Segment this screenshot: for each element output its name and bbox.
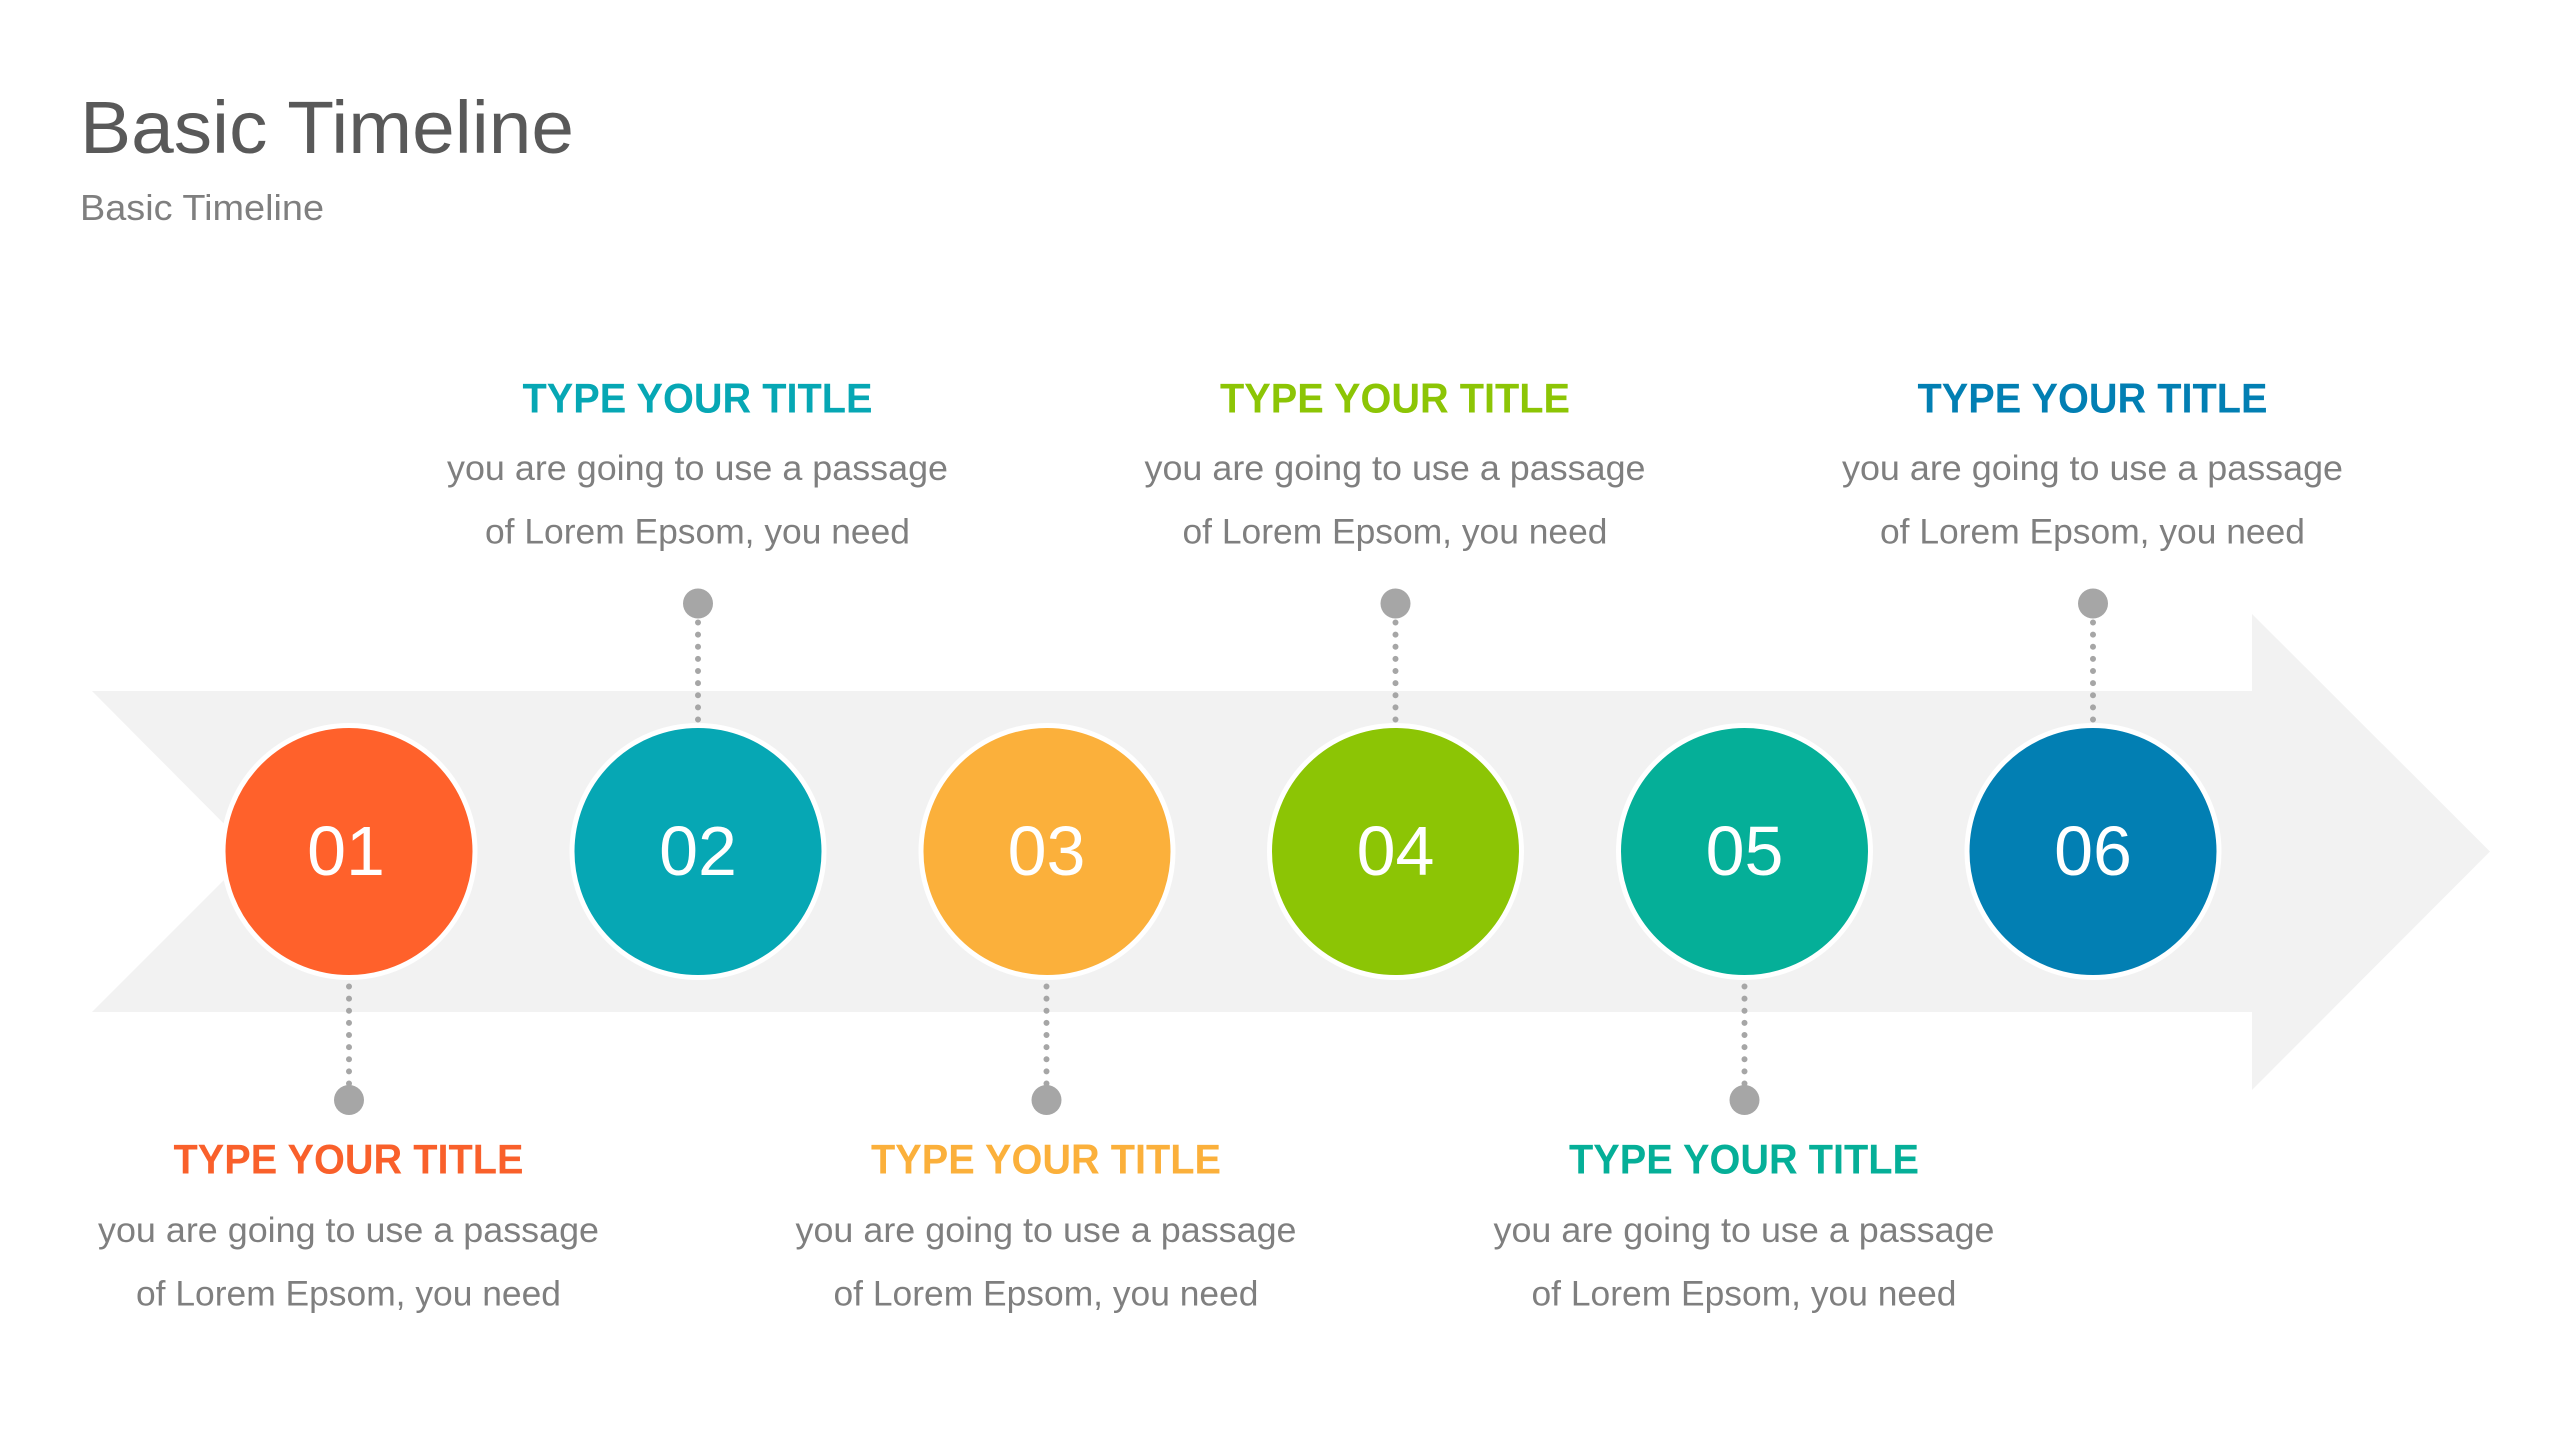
number 06: 06 [2054, 812, 2132, 890]
connector 02 [695, 622, 701, 720]
body 05: of Lorem Epsom, you need [1532, 1274, 1956, 1314]
body 05: you are going to use a passage [1494, 1210, 1994, 1250]
body 04: you are going to use a passage [1144, 448, 1646, 488]
circle 06 [1967, 726, 2219, 978]
milestone 03 [796, 726, 1296, 1314]
milestone 01 [98, 726, 599, 1314]
connector 06 [2090, 622, 2096, 720]
number 02: 02 [659, 812, 737, 890]
number 03: 03 [1008, 812, 1085, 890]
milestone 02 [447, 374, 948, 978]
milestone 06 [1842, 374, 2343, 978]
body 04 [1144, 448, 1646, 552]
body 03: of Lorem Epsom, you need [834, 1274, 1258, 1314]
connector 04 [1392, 622, 1398, 720]
heading 04: TYPE YOUR TITLE [1220, 374, 1570, 422]
body 06 [1842, 448, 2343, 552]
pin 05 [1730, 1085, 1760, 1115]
number 01: 01 [307, 812, 385, 890]
heading 06: TYPE YOUR TITLE [1918, 374, 2268, 422]
circle 01 [223, 726, 475, 978]
number 05: 05 [1706, 812, 1783, 890]
milestone 04 [1144, 374, 1646, 978]
subtitle: Basic Timeline [80, 187, 324, 228]
body 03: you are going to use a passage [796, 1210, 1296, 1250]
connector 05 [1742, 986, 1748, 1084]
body 02: of Lorem Epsom, you need [485, 512, 910, 552]
body 01: you are going to use a passage [98, 1210, 599, 1250]
heading 03: TYPE YOUR TITLE [871, 1136, 1221, 1182]
body 06: you are going to use a passage [1842, 448, 2343, 488]
title: Basic Timeline [80, 86, 574, 169]
body 05 [1494, 1210, 1994, 1314]
background arrow [92, 614, 2490, 1090]
milestone 05 [1494, 726, 1994, 1314]
body 03 [796, 1210, 1296, 1314]
number 04: 04 [1357, 812, 1434, 890]
circle 02 [572, 726, 824, 978]
pin 01 [334, 1085, 364, 1115]
pin 04 [1380, 588, 1410, 618]
connector 01 [346, 986, 352, 1084]
body 04: of Lorem Epsom, you need [1182, 512, 1608, 552]
heading 01: TYPE YOUR TITLE [174, 1136, 524, 1182]
pin 02 [683, 588, 713, 618]
circle 03 [921, 726, 1173, 978]
circle 04 [1270, 726, 1522, 978]
heading 02: TYPE YOUR TITLE [522, 374, 872, 422]
body 01 [98, 1210, 599, 1314]
body 02 [447, 448, 948, 552]
connector 03 [1044, 986, 1050, 1084]
pin 03 [1032, 1085, 1062, 1115]
body 02: you are going to use a passage [447, 448, 948, 488]
pin 06 [2078, 588, 2108, 618]
circle 05 [1618, 726, 1870, 978]
body 01: of Lorem Epsom, you need [136, 1274, 561, 1314]
body 06: of Lorem Epsom, you need [1880, 512, 2305, 552]
heading 05: TYPE YOUR TITLE [1569, 1136, 1919, 1182]
